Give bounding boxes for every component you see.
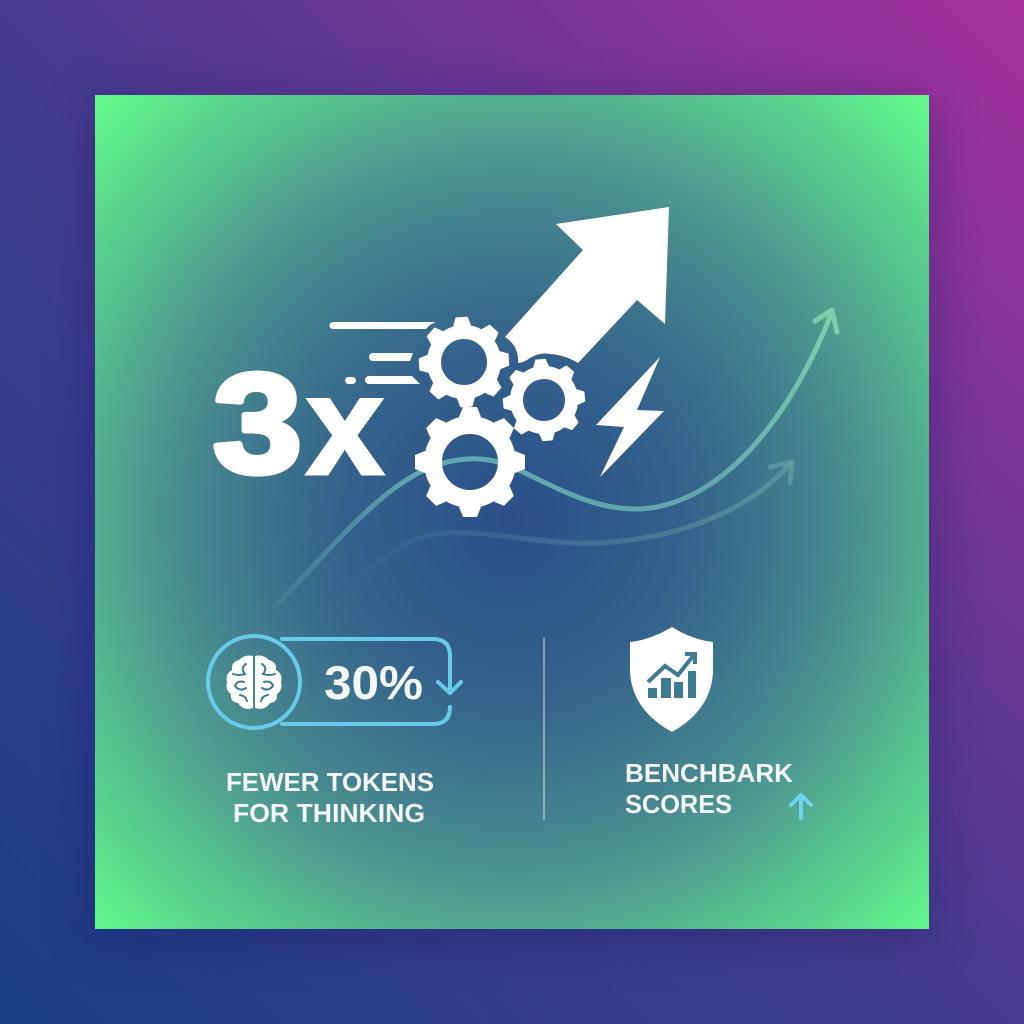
big figure: 3x: 3	[213, 344, 302, 502]
chart: main rising curve	[275, 310, 837, 607]
icon: lightning bolt	[596, 357, 664, 477]
icon: shield with chart	[630, 627, 713, 732]
icon: bottom gear	[415, 407, 525, 517]
big figure: 3x: x	[306, 346, 384, 504]
label: benchbark scores	[625, 758, 793, 819]
big figure: 3x	[213, 344, 384, 504]
label: benchbark scores: BENCHBARK	[625, 758, 793, 788]
value: 30%: 30%	[324, 656, 423, 709]
label: fewer tokens for thinking: FEWER TOKENS	[226, 767, 434, 797]
icon: big up arrow	[505, 207, 669, 363]
badge outline with down arrow	[282, 639, 461, 724]
label: benchbark scores: SCORES	[625, 789, 732, 819]
icon: up arrow	[791, 795, 811, 818]
stat: brain token badge	[208, 636, 461, 728]
brain circle	[208, 636, 300, 728]
panel: main card	[95, 95, 929, 929]
chart: faint back curve	[335, 462, 792, 607]
divider	[543, 638, 545, 820]
label: fewer tokens for thinking	[226, 767, 434, 828]
label: fewer tokens for thinking: FOR THINKING	[233, 798, 425, 828]
icon: speed lines	[330, 322, 436, 384]
icon: right gear	[500, 356, 588, 444]
icon: top gear	[417, 315, 511, 409]
icon: brain	[226, 656, 282, 709]
